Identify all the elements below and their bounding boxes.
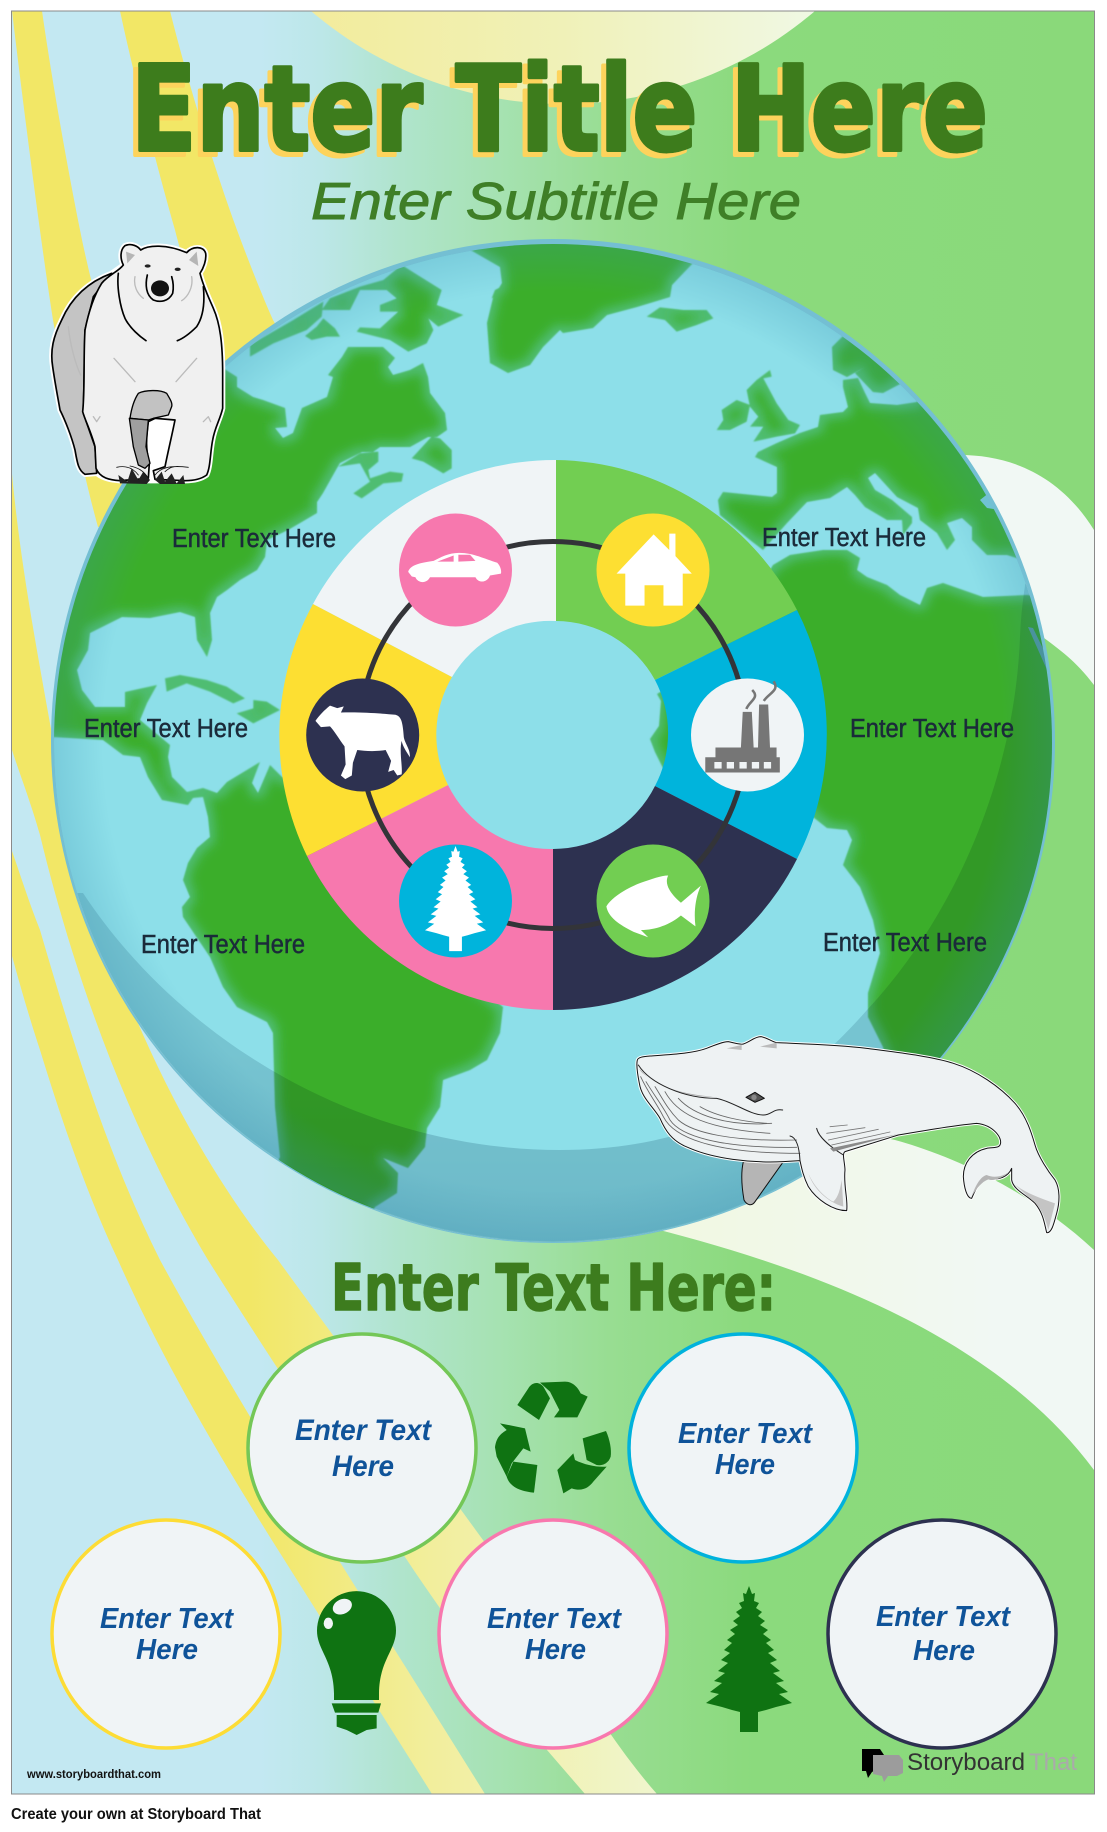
icon: tree [399,844,512,958]
label: bottom right: Enter Text Here [823,929,987,957]
logo: Storyboard That: That [1029,1749,1077,1776]
globe [20,225,1080,1260]
continents and ocean [20,225,1080,1260]
icon: recycle symbol [495,1382,611,1493]
label: middle left: Enter Text Here [84,715,248,743]
icon: light bulb [317,1591,396,1735]
bubble: yellow [52,1520,280,1748]
segment: livestock [279,604,452,856]
icon: fish [596,844,710,958]
segment: industry [655,610,827,859]
bubble: pink: Enter Text [487,1603,622,1635]
label: top left: Enter Text Here [172,525,336,553]
icon: house [596,514,710,626]
bubble: navy: Enter Text [876,1601,1011,1633]
icon: pine tree [706,1586,792,1732]
bubble: navy [828,1520,1056,1748]
segment: car [313,460,556,677]
illustration: whale [637,1037,1059,1233]
bubble: navy: Here [913,1635,975,1667]
icon: car [399,514,512,626]
logo: Storyboard That: Storyboard [907,1749,1025,1776]
bubble: pink [439,1520,667,1748]
bubble: green: Here [332,1450,394,1483]
bubble: green [248,1334,476,1562]
segment: home [556,460,797,680]
donut chart [279,460,827,1010]
bubble: yellow: Enter Text [100,1603,234,1635]
bubble: blue: Enter Text [678,1418,813,1450]
label: top right: Enter Text Here [762,524,926,552]
icon: factory [691,678,804,792]
logo: Storyboard That [862,1749,1077,1782]
website url: www.storyboardthat.com [26,1767,161,1781]
bubble: blue [629,1334,857,1562]
label: bottom left: Enter Text Here [141,931,305,959]
bubble: blue: Here [715,1449,775,1481]
segment: fish [553,786,797,1010]
illustration: polar bear [52,245,223,484]
icon: cow [306,678,419,792]
bubble: yellow: Here [136,1634,198,1666]
section heading: Enter Text Here: [331,1252,776,1326]
segment: forest [307,785,553,1010]
bubble: green: Enter Text [295,1414,433,1447]
footer caption: Create your own at Storyboard That [11,1806,262,1823]
subtitle: Enter Subtitle Here [311,173,801,231]
label: middle right: Enter Text Here [850,715,1014,743]
bubble: pink: Here [525,1634,586,1666]
